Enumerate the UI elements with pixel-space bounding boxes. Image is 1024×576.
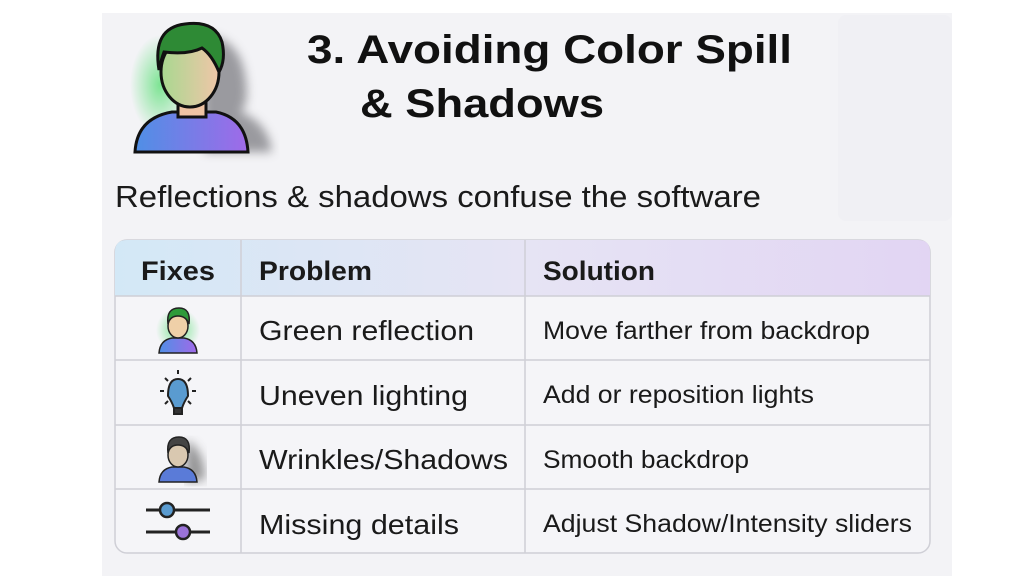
icon: shadowed person [159, 437, 205, 482]
icon: person with green spill and shadow [130, 23, 272, 152]
solution column: Move farther from backdrop [543, 317, 870, 345]
header row: Fixes [141, 256, 215, 286]
header row: Problem [259, 256, 372, 286]
problem column: Uneven lighting [259, 380, 468, 411]
problem column: Missing details [259, 509, 459, 540]
problem column: Green reflection [259, 315, 474, 346]
icon: light bulb [160, 370, 196, 414]
header row: Solution [543, 256, 655, 286]
title: & Shadows [360, 82, 604, 126]
title [307, 28, 792, 126]
solution column: Adjust Shadow/Intensity sliders [543, 510, 912, 538]
problem column: Wrinkles/Shadows [259, 444, 508, 475]
icon: green person [156, 308, 200, 353]
side panel [838, 15, 952, 221]
title: 3. Avoiding Color Spill [307, 28, 792, 72]
solution column [543, 317, 912, 538]
solution column: Smooth backdrop [543, 446, 749, 474]
solution column: Add or reposition lights [543, 381, 814, 409]
subtitle: Reflections & shadows confuse the software [115, 179, 761, 214]
icon: sliders [146, 503, 210, 539]
table [115, 240, 930, 553]
problem column [259, 315, 508, 540]
header row [141, 256, 655, 286]
